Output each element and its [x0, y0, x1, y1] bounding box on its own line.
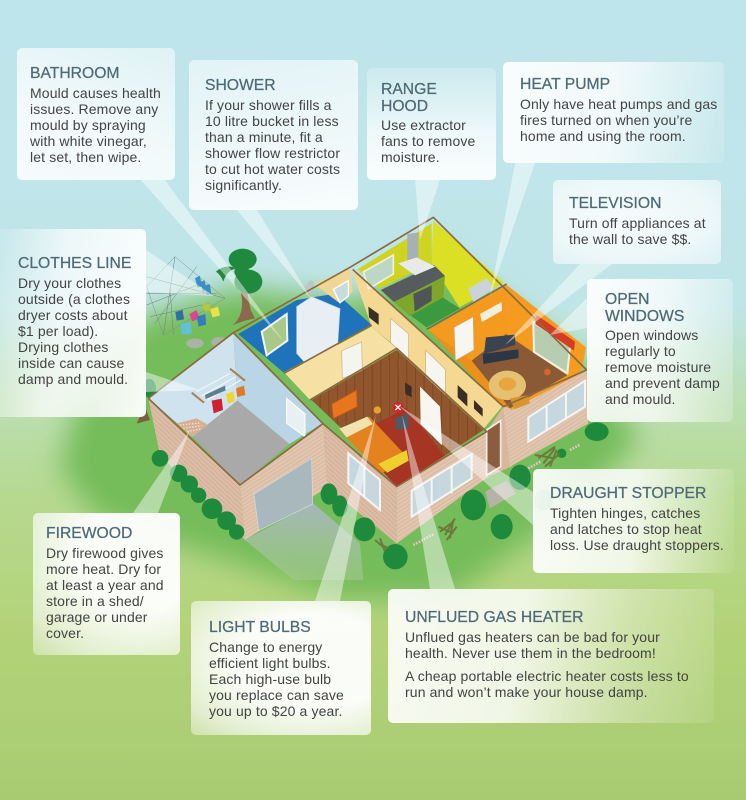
callout: draught stopper	[533, 469, 734, 573]
callout: clothes line: $1 per load).	[18, 322, 98, 338]
callout: television	[553, 180, 721, 264]
callout: heat pump	[503, 62, 724, 163]
tree	[216, 249, 262, 325]
callout: heat pump: HEAT PUMP	[520, 76, 610, 93]
callout: heat pump: fires turned on when you’re	[520, 112, 692, 128]
central hallway wall	[352, 269, 503, 428]
callout: firewood: more heat. Dry for	[46, 560, 161, 576]
callout: bathroom	[17, 48, 175, 180]
callout: television: the wall to save $$.	[569, 230, 691, 246]
callout: range hood: fans to remove	[381, 133, 475, 149]
callout: bathroom: Mould causes health	[30, 84, 161, 100]
callout: range hood: moisture.	[381, 149, 440, 165]
callout: shower: 10 litre bucket in less	[205, 112, 339, 128]
callout: heat pump: home and using the room.	[520, 128, 686, 144]
callout: draught stopper: loss. Use draught stoppers.	[550, 536, 724, 552]
callout: shower	[189, 60, 358, 210]
callout: shower: shower flow restrictor	[205, 144, 340, 160]
callout: shower: significantly.	[205, 176, 282, 192]
callout: shower: If your shower fills a	[205, 96, 332, 112]
callout: light bulbs: Each high-use bulb	[209, 670, 331, 686]
driveway	[245, 503, 363, 580]
callout: unflued gas heater: Unflued gas heaters can be bad for your	[405, 628, 660, 644]
callout: bathroom: BATHROOM	[30, 65, 119, 82]
clothes line	[147, 257, 225, 335]
range hood	[407, 233, 418, 263]
callout: draught stopper: and latches to stop heat	[550, 520, 702, 536]
callout: bathroom: let set, then wipe.	[30, 148, 141, 164]
callout: light bulbs: you up to $20 a year.	[209, 702, 342, 718]
callout: unflued gas heater: A cheap portable electric heater costs less to	[405, 668, 689, 684]
no heater symbol	[393, 402, 403, 413]
callout: clothes line: Drying clothes	[18, 338, 109, 354]
callout: firewood: store in a shed/	[46, 592, 144, 608]
callout: firewood: cover.	[46, 624, 84, 640]
callout: unflued gas heater: UNFLUED GAS HEATER	[405, 609, 583, 626]
garage interior	[148, 333, 323, 485]
callout: open windows: WINDOWS	[605, 308, 684, 324]
callout: clothes line: Dry your clothes	[18, 274, 121, 290]
callout: range hood	[367, 68, 496, 180]
callout: open windows: and mould.	[605, 391, 676, 407]
callout: bathroom: with white vinegar,	[30, 132, 147, 148]
callout: unflued gas heater	[388, 589, 714, 723]
callout: firewood	[33, 513, 180, 655]
entry steps	[485, 481, 516, 508]
firewood	[177, 418, 208, 437]
exterior walls	[148, 370, 588, 543]
callout: firewood: Dry firewood gives	[46, 544, 164, 560]
drying rack	[192, 369, 245, 413]
callout: bathroom: mould by spraying	[30, 116, 146, 132]
kitchen	[357, 221, 504, 327]
living room	[428, 285, 586, 410]
bushes	[152, 422, 609, 569]
callout: firewood: FIREWOOD	[46, 525, 132, 542]
callout: television: Turn off appliances at	[569, 214, 706, 230]
bathroom	[238, 280, 372, 372]
callout: shower: SHOWER	[205, 77, 276, 94]
callout: firewood: garage or under	[46, 608, 148, 624]
callout: heat pump: Only have heat pumps and gas	[520, 96, 717, 112]
plants and flowers	[375, 445, 580, 552]
callout: light bulbs: you replace can save	[209, 686, 344, 702]
callout: open windows	[587, 279, 733, 422]
callout: clothes line: damp and mould.	[18, 370, 128, 386]
callout: draught stopper: DRAUGHT STOPPER	[550, 485, 706, 502]
callout: unflued gas heater: run and won’t make your house damp.	[405, 684, 648, 700]
callout: open windows: Open windows	[605, 327, 698, 343]
callout: shower: than a minute, fit a	[205, 128, 323, 144]
garage door	[254, 458, 313, 531]
stepping stones	[186, 337, 227, 348]
callout: range hood: Use extractor	[381, 117, 466, 133]
exterior windows	[348, 381, 585, 517]
callout: draught stopper: Tighten hinges, catches	[550, 504, 700, 520]
bedroom	[312, 350, 483, 487]
callout: clothes line: inside can cause	[18, 354, 124, 370]
callout: clothes line: outside (a clothes	[18, 290, 130, 306]
callout: open windows: and prevent damp	[605, 375, 720, 391]
callout: firewood: at least a year and	[46, 576, 164, 592]
callout: clothes line: CLOTHES LINE	[18, 255, 131, 272]
callout: unflued gas heater: health. Never use them in the bedroom!	[405, 644, 656, 660]
shower	[297, 297, 340, 363]
callout: light bulbs: Change to energy	[209, 638, 322, 654]
callout: television: TELEVISION	[569, 195, 661, 212]
callout: clothes line	[0, 229, 146, 417]
callout: open windows: remove moisture	[605, 359, 711, 375]
callout: range hood: HOOD	[381, 98, 428, 114]
callout: light bulbs	[191, 601, 371, 735]
callout: open windows: regularly to	[605, 343, 676, 359]
callout: light bulbs: LIGHT BULBS	[209, 619, 311, 636]
callout: shower: to cut hot water costs	[205, 160, 340, 176]
callout: light bulbs: efficient light bulbs.	[209, 654, 331, 670]
hall behind bathroom	[285, 268, 397, 400]
callout: clothes line: dryer costs about	[18, 306, 128, 322]
wall tops	[148, 217, 587, 487]
callout: bathroom: issues. Remove any	[30, 100, 158, 116]
tree behind garage	[137, 379, 156, 423]
callout: open windows: OPEN	[605, 291, 649, 308]
callout: range hood: RANGE	[381, 81, 437, 98]
